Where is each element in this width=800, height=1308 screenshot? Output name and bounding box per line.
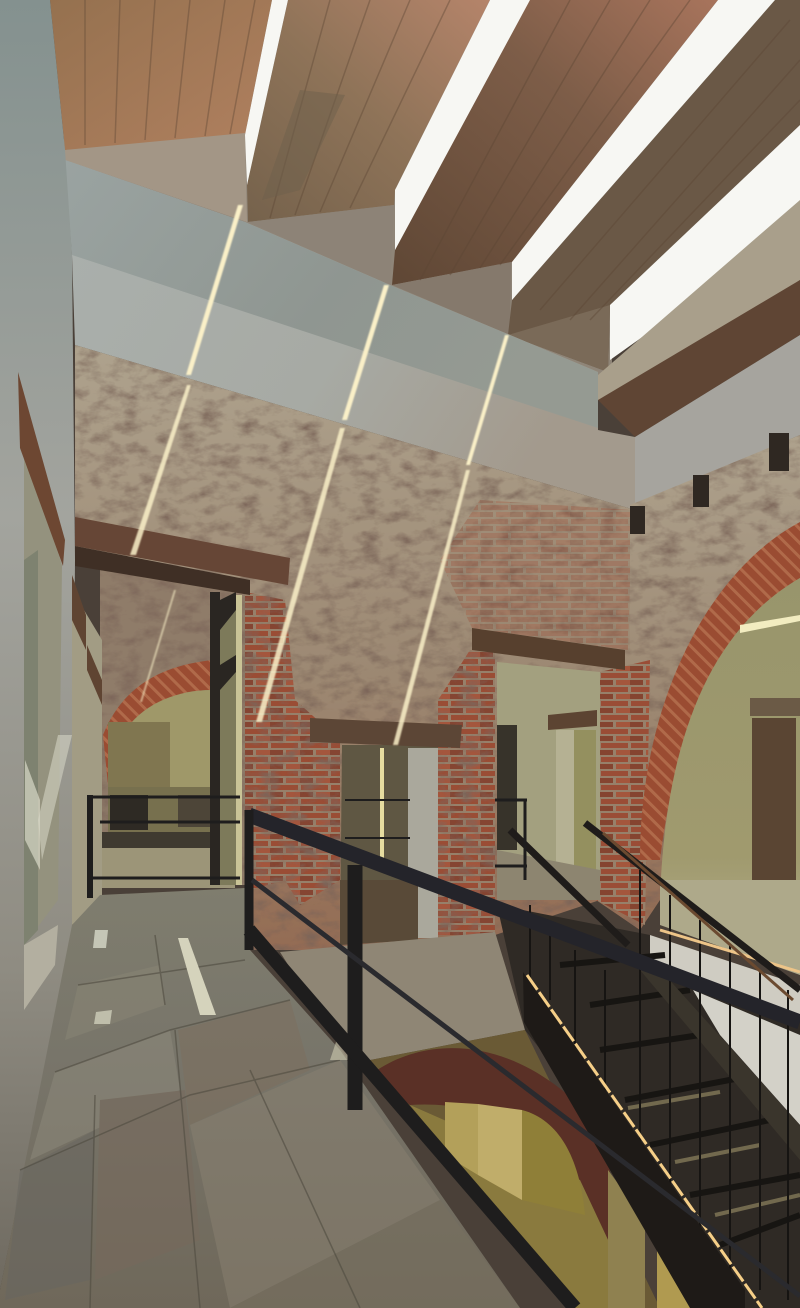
brick courses on the wall <box>440 500 632 650</box>
baluster bars <box>530 870 788 1300</box>
left doorway into arched room <box>75 517 290 888</box>
dark concrete stain <box>262 90 345 200</box>
central corridor beyond the wall <box>472 628 625 900</box>
brick jamb: centre pier <box>245 592 340 905</box>
ceiling: timber-formed vaults and skylights <box>50 0 800 380</box>
upper stair handrails <box>660 930 800 972</box>
concrete band below the ceiling <box>65 160 635 510</box>
concrete balustrade <box>280 932 525 1062</box>
timber plank lines <box>85 0 800 320</box>
white wall seen through balusters <box>650 935 800 1020</box>
right brick wall with arch <box>596 433 800 930</box>
small wall openings <box>630 433 789 534</box>
right plaster wall <box>635 335 800 505</box>
skylights <box>245 0 800 360</box>
lower stair well <box>360 1030 705 1308</box>
steel staircase <box>497 823 800 1308</box>
left wall window recess <box>18 372 102 1010</box>
lit stair treads <box>560 955 800 1245</box>
left wall <box>0 0 75 1290</box>
brick jamb: right pier <box>438 650 495 935</box>
floor tile tones <box>5 965 520 1308</box>
black steel railings <box>88 795 800 1308</box>
light streaks on wall <box>130 205 509 745</box>
right concrete beam <box>598 200 800 437</box>
wooden lintel <box>75 517 290 585</box>
marble floor <box>0 888 520 1308</box>
central opening with pillar <box>310 718 462 945</box>
arched opening with glass room <box>660 578 800 975</box>
brick and stone wall <box>75 345 635 950</box>
